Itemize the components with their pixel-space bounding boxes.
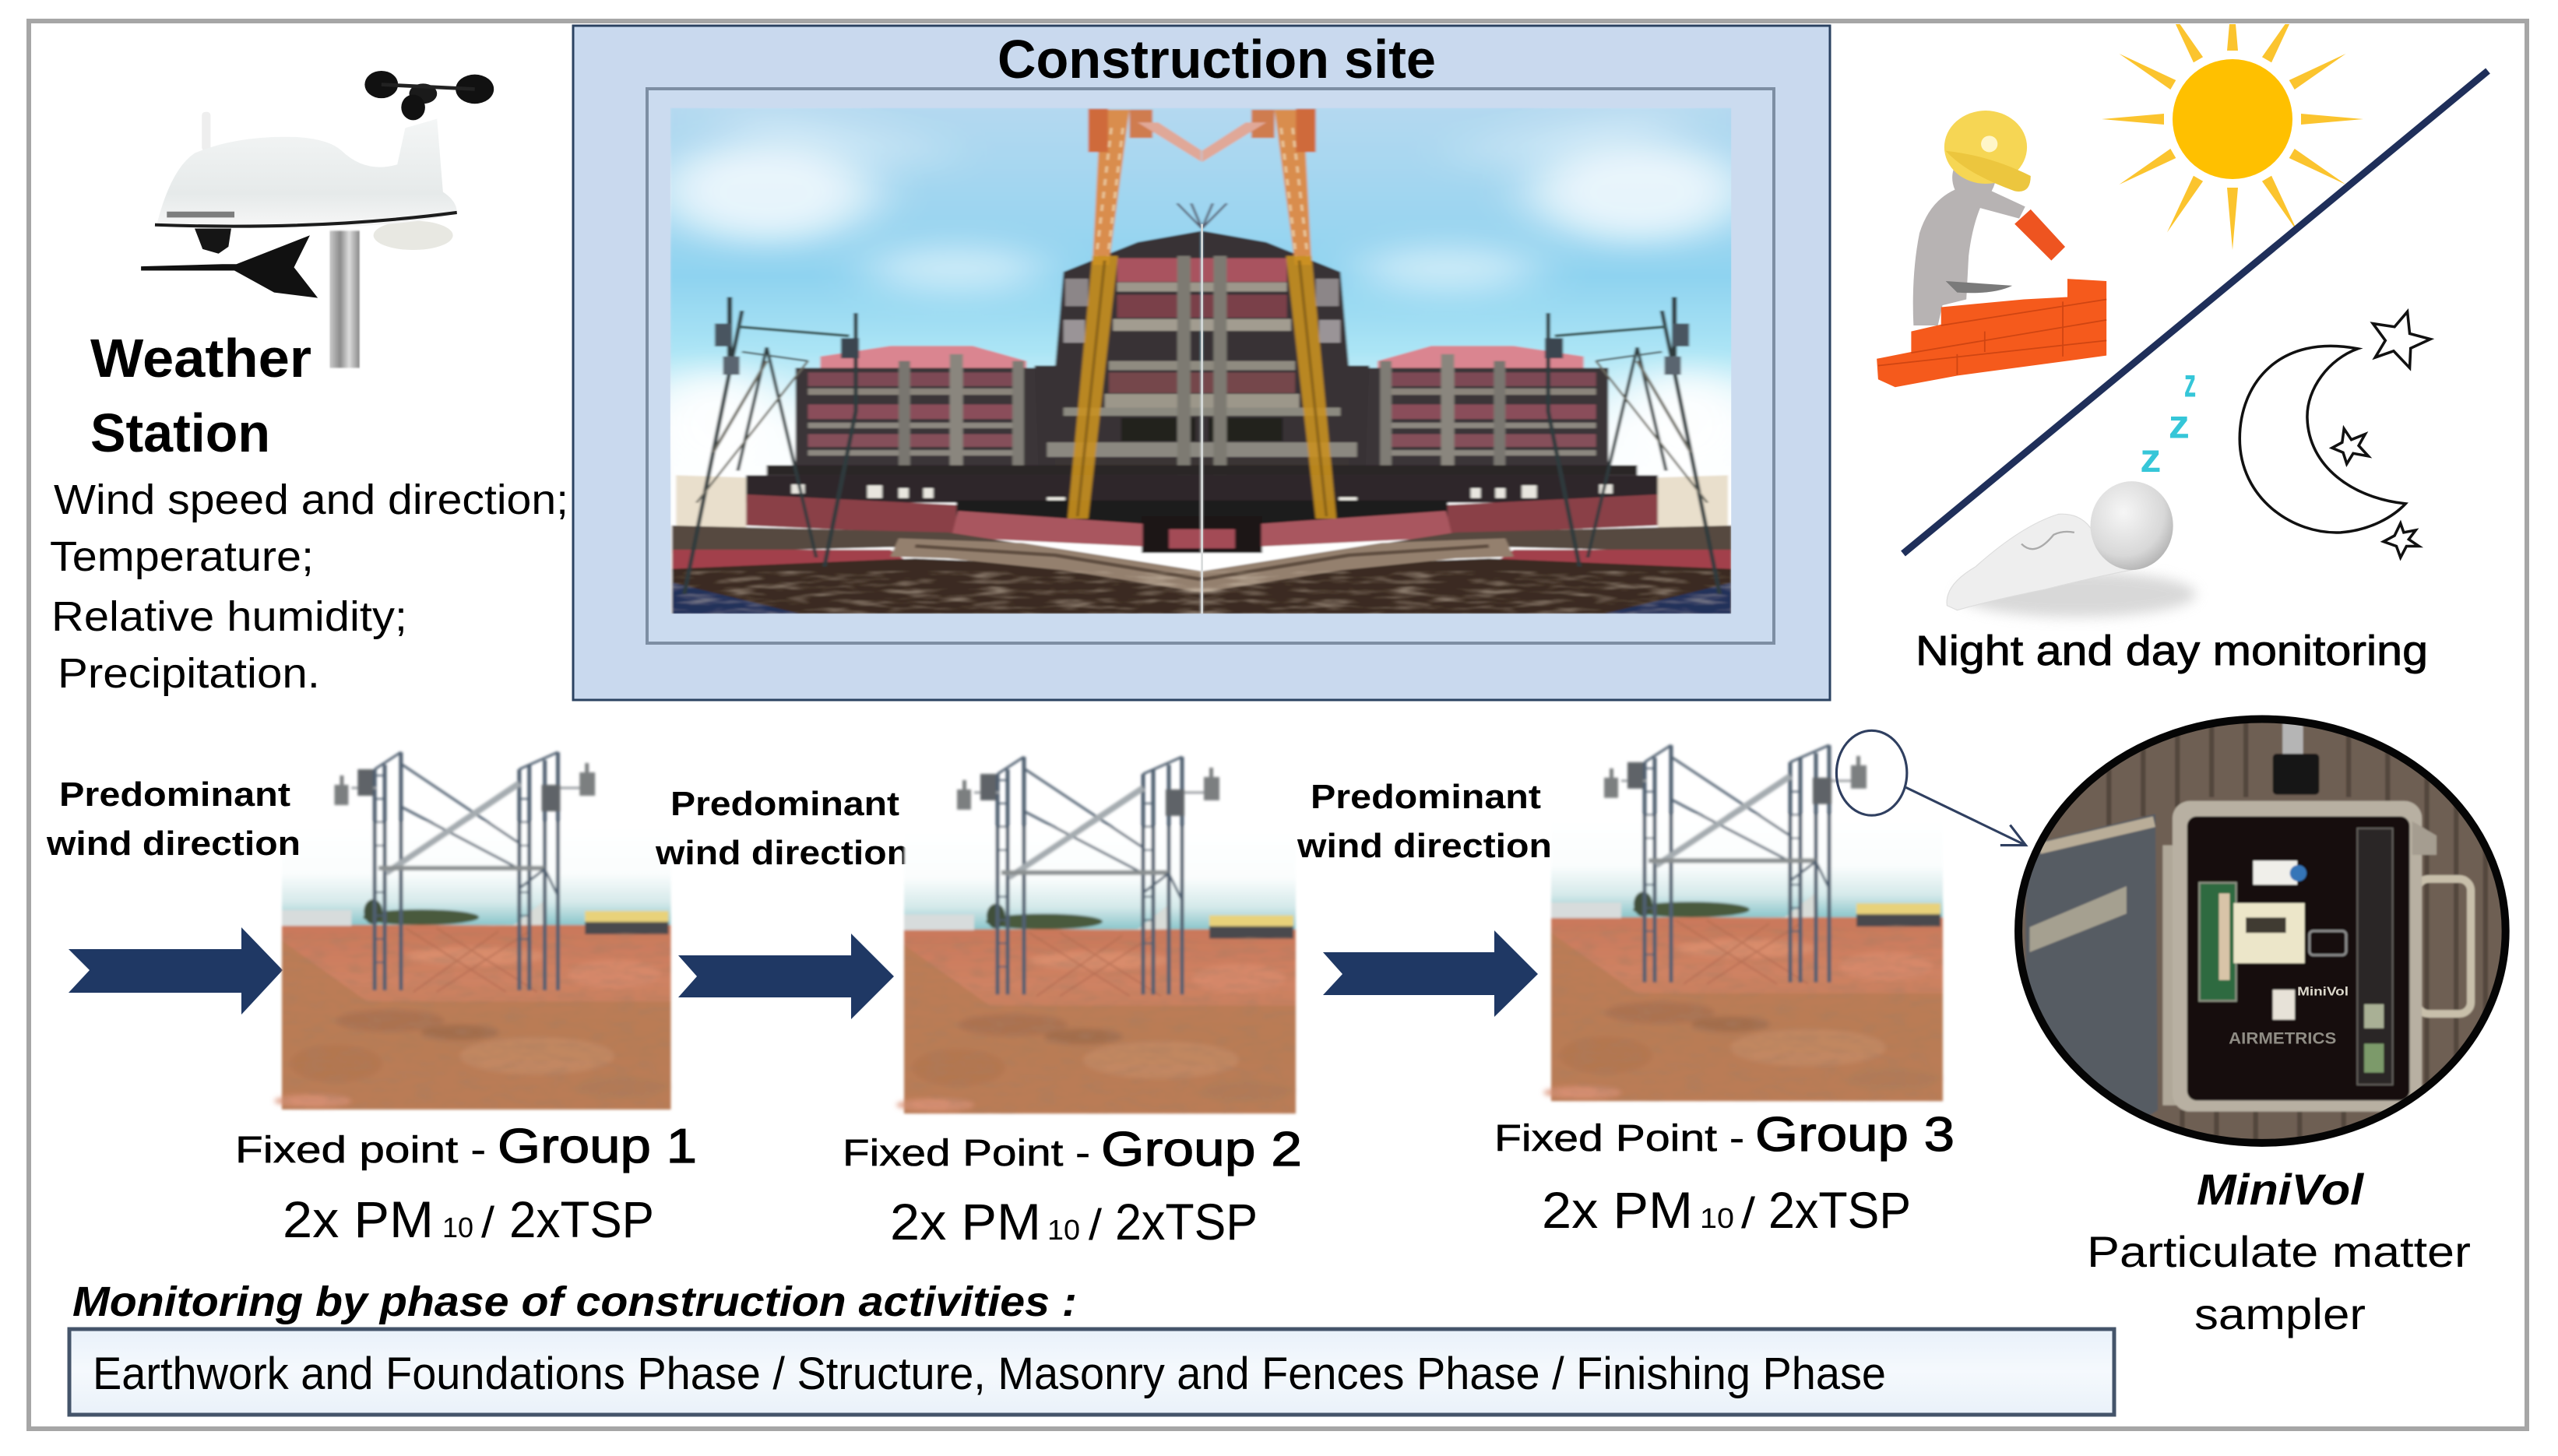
label: MiniVol particulate matter sampler: MiniVol	[2197, 1165, 2365, 1214]
device labels	[2229, 985, 2349, 1047]
day/night diagonal divider	[1903, 71, 2488, 554]
heading: monitoring by phase: Monitoring by phase of construction activities :	[72, 1278, 1077, 1325]
label: MiniVol particulate matter sampler	[2087, 1165, 2471, 1338]
icon: sleeping figure	[1947, 360, 2196, 617]
label: group 3 samplers: /	[1741, 1188, 1756, 1237]
label: predominant wind direction 1	[46, 775, 301, 863]
inner frame	[647, 89, 1774, 643]
icon: moon and stars	[2240, 311, 2430, 557]
label: group 1 samplers: /	[481, 1198, 494, 1247]
label: group 3 samplers: 2xTSP	[1768, 1181, 1911, 1239]
label: group 1 samplers	[283, 1190, 654, 1248]
label: group 2 samplers: /	[1089, 1200, 1102, 1249]
label: group 3 samplers: 2x PM	[1542, 1181, 1693, 1239]
label: group 3 samplers: 10	[1700, 1202, 1734, 1234]
callout: sampler highlight circle and arrow	[1836, 730, 2025, 846]
text: measured parameters	[50, 477, 568, 697]
photo: mirrored building under construction	[643, 101, 1761, 614]
label: predominant wind direction 3	[1297, 778, 1552, 865]
label: predominant wind direction 2	[655, 785, 910, 872]
device labels: MiniVol	[2297, 985, 2349, 999]
label: MiniVol particulate matter sampler: Particulate matter	[2087, 1227, 2471, 1276]
photo: fixed point group 3	[1543, 745, 1943, 1101]
arrow: wind direction 1	[69, 927, 283, 1015]
label: fixed point group 1: Group 1	[498, 1120, 697, 1173]
label: predominant wind direction 3: Predominant	[1311, 778, 1541, 816]
text: measured parameters: Temperature;	[50, 533, 314, 580]
label: predominant wind direction 1: Predominant	[59, 775, 290, 814]
label: fixed point group 3: Group 3	[1755, 1108, 1955, 1162]
label: group 2 samplers: 2xTSP	[1115, 1193, 1258, 1250]
device labels: AIRMETRICS	[2229, 1030, 2336, 1047]
panel: construction site	[573, 26, 1830, 700]
icon: worker laying bricks	[1877, 111, 2106, 387]
arrow: wind direction 2	[678, 934, 894, 1019]
label: fixed point group 2: Group 2	[1101, 1123, 1302, 1176]
label: fixed point group 2	[843, 1123, 1302, 1176]
photo: fixed point group 2	[896, 757, 1296, 1113]
label: group 3 samplers	[1542, 1181, 1911, 1239]
label: group 2 samplers: 10	[1047, 1214, 1080, 1246]
icon: sleeping figure: z	[2169, 401, 2190, 446]
label: group 1 samplers: 10	[442, 1212, 473, 1243]
heading: Weather Station: Station	[90, 403, 270, 463]
text: measured parameters: Relative humidity;	[51, 593, 407, 640]
panel: night and day monitoring	[1877, 0, 2488, 674]
label: MiniVol particulate matter sampler: sampler	[2194, 1289, 2366, 1338]
heading: Weather Station: Weather	[90, 328, 311, 389]
icon: sun	[2102, 0, 2363, 250]
icon: weather station	[141, 71, 494, 368]
photo: fixed point group 1	[274, 752, 670, 1110]
label: group 2 samplers: 2x PM	[890, 1193, 1041, 1250]
text: measured parameters: Wind speed and direction;	[54, 477, 568, 523]
icon: sleeping figure: z	[2140, 435, 2161, 480]
text: measured parameters: Precipitation.	[58, 650, 320, 697]
label: predominant wind direction 2: Predominant	[670, 785, 899, 823]
label: fixed point group 3: Fixed Point -	[1494, 1118, 1744, 1159]
box: construction phases: Earthwork and Foundations Phase / Structure, Masonry and Fences Phase / Finishing Phase	[93, 1349, 1886, 1399]
panel: weather station	[50, 71, 568, 697]
photo: MiniVol sampler	[2011, 710, 2515, 1153]
label: group 1 samplers: 2xTSP	[509, 1190, 654, 1248]
label: group 1 samplers: 2x PM	[283, 1190, 434, 1248]
icon: sleeping figure: z	[2184, 360, 2196, 405]
label: predominant wind direction 1: wind direction	[46, 825, 301, 863]
heading: Construction site: Construction site	[998, 29, 1436, 90]
arrow: wind direction 3	[1323, 930, 1538, 1017]
box: construction phases	[69, 1329, 2114, 1415]
label: predominant wind direction 2: wind direction	[655, 834, 910, 872]
label: fixed point group 1: Fixed point -	[235, 1130, 486, 1171]
label: group 2 samplers	[890, 1193, 1258, 1250]
heading: Weather Station	[90, 328, 311, 463]
label: Night and day monitoring: Night and day monitoring	[1916, 628, 2428, 674]
label: fixed point group 1	[235, 1120, 697, 1173]
label: predominant wind direction 3: wind direction	[1297, 827, 1552, 865]
label: fixed point group 2: Fixed Point -	[843, 1133, 1090, 1174]
label: fixed point group 3	[1494, 1108, 1955, 1162]
